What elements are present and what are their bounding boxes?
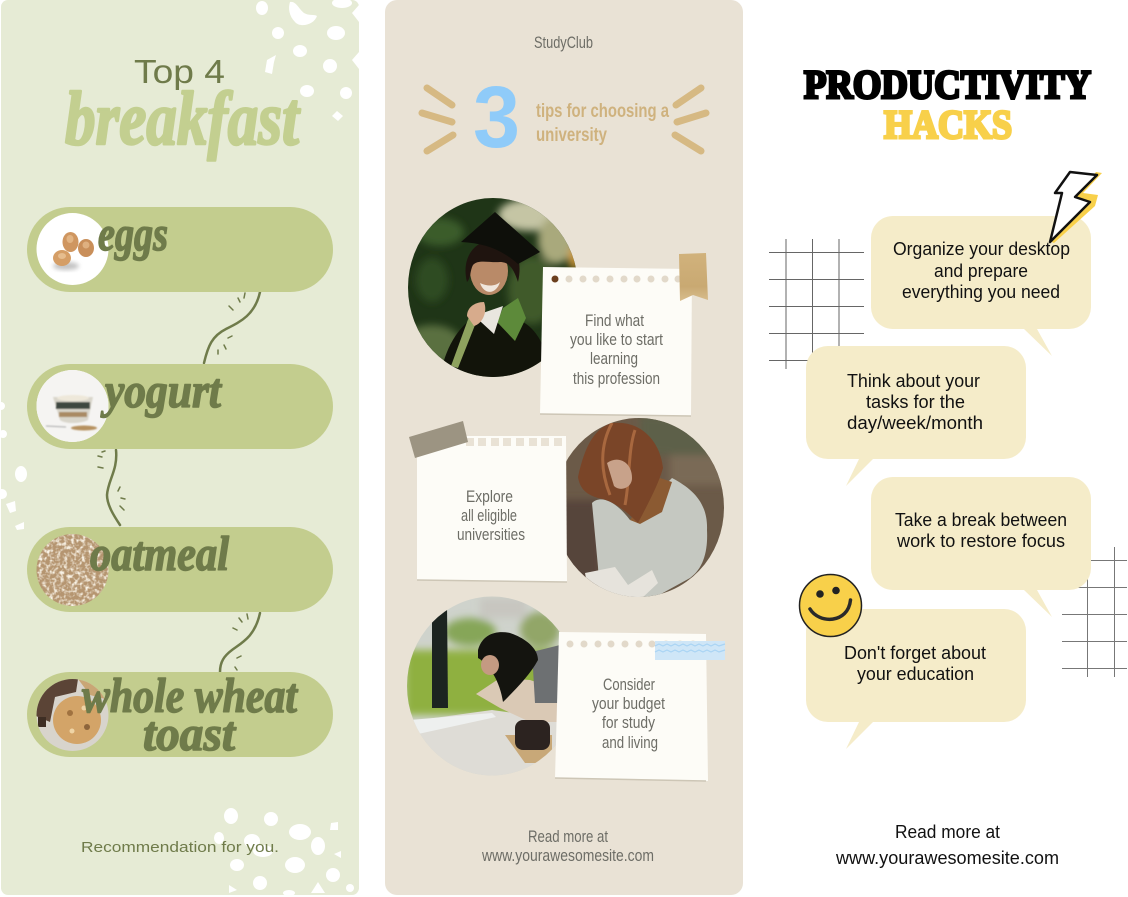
decorative square punch holes <box>466 438 562 446</box>
arrow: squiggle oatmeal to whole wheat <box>220 613 260 672</box>
decorative grid, right <box>1062 547 1127 677</box>
number: 3: 3 <box>473 69 520 166</box>
heading: breakfast: breakfast <box>65 77 301 161</box>
panel: productivity hacks <box>768 0 1128 895</box>
icon: oatmeal photo <box>36 534 109 606</box>
icon: left rays <box>422 88 453 151</box>
bubble: think <box>806 346 1026 486</box>
text: consider: for study <box>602 713 655 732</box>
footer: recommendation: Recommendation for you. <box>81 839 279 856</box>
label: whole wheat toast: whole wheat <box>82 668 298 723</box>
icon: eggs photo <box>53 232 94 270</box>
text: take a break: work to restore focus <box>896 531 1065 551</box>
text: think: day/week/month <box>847 413 983 433</box>
arrow: squiggle eggs to yogurt <box>204 292 260 363</box>
decorative punch holes <box>566 640 696 648</box>
icon: right rays <box>675 88 706 151</box>
bubble: take a break <box>871 477 1091 617</box>
heading: hacks: HACKS <box>884 102 1012 147</box>
item: yogurt <box>27 363 333 449</box>
text: organize: Organize your desktop <box>893 239 1070 259</box>
text: organize: and prepare <box>934 261 1028 281</box>
text: think: tasks for the <box>866 392 965 412</box>
text: find what: you like to start <box>570 330 663 349</box>
icon: yogurt photo <box>36 370 109 442</box>
footer: read more <box>835 822 1059 868</box>
icon: gold ribbon tape <box>679 253 708 301</box>
text: consider: your budget <box>592 694 665 713</box>
icon: smiley <box>800 574 862 636</box>
footer: read more: www.yourawesomesite.com <box>481 846 654 865</box>
label: eggs: eggs <box>98 206 168 261</box>
brand: StudyClub: StudyClub <box>534 33 593 52</box>
footer: read more: Read more at <box>895 822 1000 842</box>
label: yogurt: yogurt <box>101 363 222 418</box>
text: explore: Explore <box>466 487 513 506</box>
decorative grid, left <box>769 239 864 369</box>
heading: productivity: PRODUCTIVITY <box>804 62 1091 107</box>
text: education: your education <box>857 664 974 684</box>
heading: tips for choosing a university: university <box>536 125 607 146</box>
item: eggs <box>27 206 333 292</box>
text: find what <box>570 311 663 388</box>
label: whole wheat toast <box>82 668 298 761</box>
text: consider <box>592 675 665 752</box>
decorative white confetti, bottom right <box>224 808 238 824</box>
arrow: squiggle yogurt to oatmeal <box>98 450 125 525</box>
text: take a break: Take a break between <box>895 510 1067 530</box>
bubble: education <box>806 609 1026 749</box>
note: explore <box>409 421 567 582</box>
heading: tips for choosing a university <box>536 101 669 146</box>
text: education: Don't forget about <box>844 643 986 663</box>
item: whole wheat toast <box>27 668 333 761</box>
text: organize: everything you need <box>902 282 1060 302</box>
heading: top 4: Top 4 <box>134 53 225 90</box>
decorative punch holes <box>552 276 682 282</box>
icon: blue patterned tape <box>655 641 725 660</box>
photo: graduate <box>408 198 576 377</box>
text: think: Think about your <box>847 371 980 391</box>
icon: toast photo <box>36 679 109 751</box>
label: oatmeal: oatmeal <box>90 526 229 581</box>
text: take a break <box>895 510 1067 551</box>
footer: read more <box>481 827 654 865</box>
text: explore: universities <box>457 525 525 544</box>
text: consider: and living <box>602 733 658 752</box>
bubble: organize <box>871 216 1091 356</box>
text: explore: all eligible <box>461 506 517 525</box>
panel: 3 tips for choosing a university <box>385 0 743 895</box>
text: organize <box>893 239 1070 302</box>
text: consider: Consider <box>603 675 655 694</box>
icon: lightning bolt <box>1050 172 1102 243</box>
decorative white confetti, left edge <box>15 466 27 482</box>
footer: read more: Read more at <box>528 827 608 846</box>
text: think <box>847 371 983 433</box>
decorative white confetti, top right <box>0 0 359 896</box>
item: oatmeal <box>27 526 333 612</box>
photo: student writing <box>407 596 560 776</box>
heading: tips for choosing a university: tips for choosing a <box>536 101 669 122</box>
note: find what <box>540 253 708 416</box>
photo: woman reading <box>566 418 724 597</box>
note: consider <box>555 632 725 781</box>
text: find what: this profession <box>573 369 660 388</box>
text: explore <box>457 487 525 544</box>
footer: read more: www.yourawesomesite.com <box>835 848 1059 868</box>
text: find what: learning <box>590 349 638 368</box>
icon: grey tape <box>409 421 468 458</box>
label: whole wheat toast: toast <box>143 706 236 761</box>
text: education <box>844 643 986 684</box>
panel: top 4 breakfast <box>0 0 359 896</box>
text: find what: Find what <box>585 311 644 330</box>
